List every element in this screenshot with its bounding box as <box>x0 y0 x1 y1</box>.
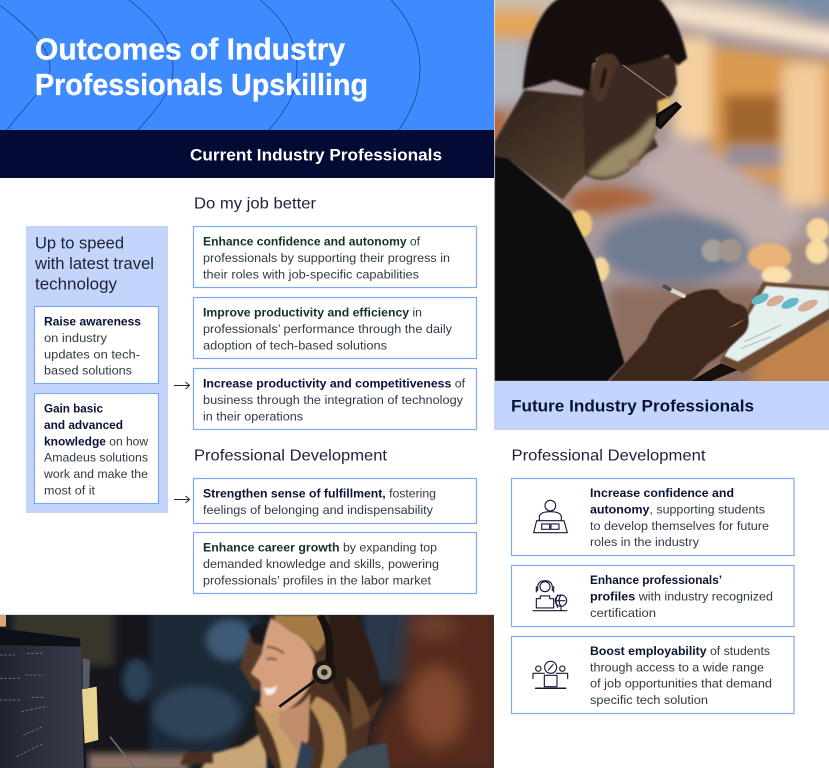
card: enhance career growth: Enhance career growth by expanding top <box>203 540 437 554</box>
card: increase confidence <box>512 478 794 556</box>
section band: current industry professionals <box>0 130 494 178</box>
card: enhance confidence: professionals by supporting their progress in <box>203 251 450 265</box>
card: raise awareness: Raise awareness <box>44 314 141 328</box>
card: strengthen fulfillment: feelings of belonging and indispensability <box>203 503 434 517</box>
heading: professional development (future): Professional Development <box>512 448 706 464</box>
card: increase confidence: to develop themselves for future <box>590 519 769 533</box>
hair back <box>255 615 383 768</box>
card: improve productivity: professionals’ performance through the daily <box>203 322 453 336</box>
card: enhance profiles: profiles with industry recognized <box>590 590 773 604</box>
man body and head <box>494 0 687 200</box>
woman <box>251 615 390 768</box>
card: gain basic knowledge: Amadeus solutions <box>44 450 148 464</box>
card: improve productivity <box>194 298 476 358</box>
arrow: to increase productivity <box>174 382 190 389</box>
card: increase productivity: business through the integration of technology <box>203 393 464 407</box>
card: enhance profiles: certification <box>590 606 656 620</box>
card: boost employability: through access to a wide range <box>590 660 764 674</box>
photo: man with tablet <box>481 0 829 400</box>
card: strengthen fulfillment: Strengthen sense of fulfillment, fostering <box>203 486 436 500</box>
tablet <box>719 282 829 373</box>
man behind <box>180 625 270 768</box>
card: enhance confidence <box>194 226 476 288</box>
face <box>583 57 677 180</box>
card: enhance career growth <box>194 532 476 594</box>
icon: group at laptop <box>533 661 568 688</box>
card: increase productivity <box>194 368 476 430</box>
card: enhance career growth: professionals’ profiles in the labor market <box>203 574 432 588</box>
ear <box>591 54 618 101</box>
section band: future industry professionals: Future Industry Professionals <box>511 396 754 416</box>
jacket <box>337 743 390 768</box>
stylus <box>665 287 684 296</box>
card: raise awareness: based solutions <box>44 364 132 378</box>
photo: woman with headset <box>0 603 500 768</box>
panel heading: with latest travel <box>34 254 154 273</box>
arrow: to strengthen fulfillment <box>174 496 190 503</box>
panel heading <box>34 234 154 294</box>
card: gain basic knowledge: work and make the <box>43 467 148 481</box>
card: gain basic knowledge <box>34 394 158 504</box>
card: gain basic knowledge: knowledge on how <box>44 434 148 448</box>
card: boost employability: of job opportunities that demand <box>590 676 772 690</box>
hair <box>523 0 687 92</box>
section band: current industry professionals: Current Industry Professionals <box>190 146 442 164</box>
card: enhance profiles: Enhance professionals’ <box>590 573 722 587</box>
title: Outcomes of Industry <box>35 32 345 66</box>
card: raise awareness <box>34 306 158 384</box>
face <box>251 618 315 712</box>
card: increase confidence: roles in the industry <box>590 535 700 549</box>
card: gain basic knowledge: most of it <box>44 484 96 498</box>
white edge above lower photo <box>0 614 494 615</box>
panel: up to speed <box>26 226 168 513</box>
bokeh lights <box>569 210 829 284</box>
neck <box>494 90 591 200</box>
card: enhance career growth: demanded knowledge and skills, powering <box>203 557 439 571</box>
section band: future industry professionals <box>494 381 829 430</box>
icon: person at desk with book <box>534 500 567 533</box>
card: boost employability: specific tech solution <box>590 693 708 707</box>
heading: professional development: Professional Development <box>194 448 388 464</box>
card: improve productivity: Improve productivity and efficiency in <box>203 306 422 320</box>
card: gain basic knowledge: and advanced <box>44 418 123 432</box>
card: increase confidence: autonomy, supporting students <box>590 502 765 516</box>
title: Professionals Upskilling <box>35 68 368 102</box>
icon: agent with headset and globe <box>533 581 567 611</box>
arm and hand <box>609 289 749 381</box>
card: increase productivity: in their operations <box>203 410 303 424</box>
card: boost employability: Boost employability of students <box>590 644 770 658</box>
monitor <box>0 615 98 768</box>
card: enhance confidence: Enhance confidence and autonomy of <box>203 234 421 248</box>
card: enhance confidence: their roles with job-specific capabilities <box>203 268 419 282</box>
card: raise awareness: updates on tech- <box>44 348 140 362</box>
card: increase productivity: Increase productivity and competitiveness of <box>203 376 466 390</box>
card: boost employability <box>512 636 794 714</box>
card: improve productivity: adoption of tech-based solutions <box>203 338 387 352</box>
header banner <box>0 0 494 130</box>
headset <box>279 615 336 707</box>
card: enhance profiles <box>512 566 794 626</box>
blurred foreground person <box>367 615 494 768</box>
shirt <box>494 157 624 381</box>
card: gain basic knowledge: Gain basic <box>44 402 103 416</box>
panel heading: Up to speed <box>35 234 124 252</box>
neck <box>278 693 310 753</box>
title <box>35 32 368 102</box>
card: raise awareness: on industry <box>44 331 108 345</box>
card: increase confidence: Increase confidence and <box>590 486 734 500</box>
heading: do my job better: Do my job better <box>194 196 316 212</box>
panel heading: technology <box>35 274 118 294</box>
glasses <box>576 61 680 127</box>
card: strengthen fulfillment <box>194 478 476 524</box>
